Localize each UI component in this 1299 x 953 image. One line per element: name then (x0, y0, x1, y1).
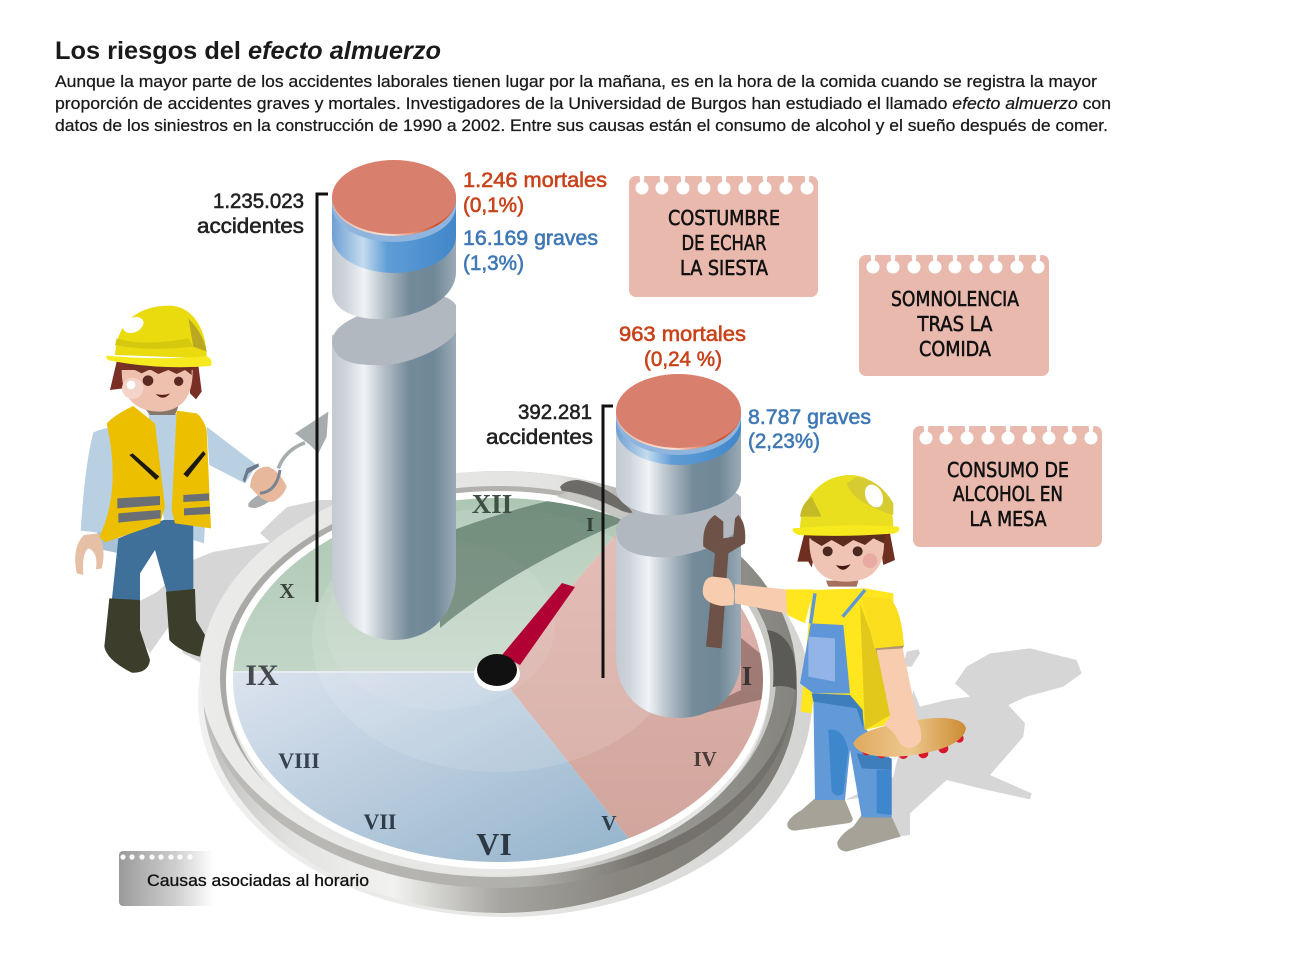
sector: blue (233, 673, 628, 862)
eyes and mouth (823, 546, 833, 556)
numeral III fragment: I (742, 661, 752, 691)
label: total right (486, 400, 593, 449)
clock hand (474, 583, 575, 691)
column cut face (332, 296, 456, 365)
eyes and mouth (143, 375, 153, 386)
column upper part (332, 197, 456, 319)
numeral I: I (586, 514, 594, 536)
trousers (813, 695, 892, 817)
worker right with wrench and bread (703, 475, 966, 852)
shirt (148, 414, 179, 520)
label: total right: accidentes (486, 425, 593, 449)
fatal disc (616, 376, 741, 450)
column shadow on green sector (440, 499, 626, 628)
shirt (801, 588, 893, 730)
hand on bread (884, 711, 921, 748)
boots (104, 598, 150, 673)
ring highlight top (557, 492, 632, 520)
note: alcohol (913, 425, 1102, 547)
bib overalls (800, 590, 865, 728)
label: fatal left: 1.246 mortales (463, 168, 607, 192)
hair (110, 362, 202, 399)
numeral VIII: VIII (278, 748, 320, 773)
intro text: proporción de accidentes graves y mortales. Investigadores de la Universidad de Burgos han estudiado el llamado efecto almuerzo con (55, 95, 1111, 113)
label: total left: accidentes (197, 214, 304, 238)
intro text (55, 73, 1111, 135)
clock base depth (203, 471, 797, 913)
face highlight (452, 508, 650, 772)
title: Los riesgos del efecto almuerzo (55, 37, 441, 65)
label: fatal left (463, 168, 607, 217)
numeral VII: VII (363, 809, 397, 834)
leader line left (317, 194, 328, 602)
left hand (75, 533, 104, 575)
hand on wrench (703, 577, 734, 606)
label: serious right: 8.787 graves (748, 405, 871, 429)
column: total lunch accidents (616, 374, 741, 718)
clock white rim (226, 491, 770, 869)
legend (119, 851, 369, 906)
wrench (703, 515, 745, 648)
note: somnolencia: TRAS LA (917, 312, 993, 336)
trowel (248, 412, 328, 508)
column lower part (332, 315, 456, 640)
numeral XII: XII (472, 489, 512, 519)
back sleeve (207, 427, 257, 483)
label: serious left: (1,3%) (463, 251, 524, 275)
column: total morning accidents (332, 160, 456, 640)
note: siesta (629, 175, 818, 297)
label: fatal right (619, 322, 746, 371)
face inner highlight (325, 540, 555, 710)
label: serious left: 16.169 graves (463, 226, 598, 250)
ring shadow top (560, 480, 634, 514)
label: total left (197, 189, 304, 238)
right hand (250, 467, 287, 502)
label: total left: 1.235.023 (213, 189, 304, 213)
leader line right (603, 406, 613, 678)
label: serious left (463, 226, 598, 275)
clock outer edge (198, 483, 812, 917)
sector: red (510, 535, 763, 838)
worker left with trowel (75, 306, 328, 673)
note: somnolencia: SOMNOLENCIA (891, 287, 1019, 311)
helmet (106, 306, 212, 367)
trousers (112, 517, 193, 602)
face (122, 370, 193, 412)
label: fatal right: (0,24 %) (644, 347, 722, 371)
clock groove (220, 486, 776, 870)
helmet (793, 475, 899, 536)
shoes (787, 798, 853, 831)
note: siesta: COSTUMBRE (668, 206, 780, 230)
note: somnolencia: COMIDA (919, 337, 991, 361)
white separators along sector edges (233, 671, 478, 673)
sleeve right (862, 597, 904, 651)
label: total right: 392.281 (518, 400, 592, 424)
sleeve left (786, 589, 813, 623)
note: alcohol: ALCOHOL EN (953, 482, 1063, 506)
shadow of right worker (845, 648, 1082, 837)
fatal disc (332, 162, 456, 236)
extended arm (735, 584, 795, 615)
legend: Causas asociadas al horario (147, 872, 369, 890)
bread (853, 718, 966, 759)
clock outer ring (200, 471, 796, 877)
label: fatal left: (0,1%) (463, 193, 524, 217)
serious band (332, 197, 456, 273)
numeral X: X (279, 579, 295, 603)
clock (198, 470, 812, 917)
note: siesta: DE ECHAR (682, 231, 767, 255)
clock lip (205, 496, 793, 888)
neck (143, 407, 178, 415)
neck (826, 581, 858, 587)
face (809, 538, 884, 582)
column cut face (616, 490, 741, 557)
numeral IX: IX (245, 659, 279, 692)
note: alcohol: LA MESA (970, 507, 1047, 531)
numeral V: V (601, 811, 617, 835)
note: alcohol: CONSUMO DE (947, 458, 1069, 482)
numeral VI: VI (476, 826, 512, 862)
vest (99, 406, 211, 542)
serious band (616, 411, 741, 465)
intro text: Aunque la mayor parte de los accidentes laborales tienen lugar por la mañana, es en la hora de la comida cuando se registra la mayor (55, 73, 1098, 91)
bare arm (877, 648, 918, 723)
clock inner light band (226, 493, 770, 875)
clock face sectors (233, 498, 763, 862)
label: serious right: (2,23%) (748, 429, 820, 453)
numeral IV: IV (693, 747, 717, 771)
label: serious right (748, 405, 871, 453)
left sleeve (81, 427, 119, 535)
sector: green (233, 498, 621, 671)
column lower part (616, 510, 741, 718)
intro text: datos de los siniestros en la construcción de 1990 a 2002. Entre sus causas están el consumo de alcohol y el sueño después de comer. (55, 117, 1108, 135)
note: siesta: LA SIESTA (680, 256, 768, 280)
column shadow on red sector (683, 638, 768, 718)
hair (797, 533, 895, 567)
note: somnolencia (859, 254, 1049, 376)
label: fatal right: 963 mortales (619, 322, 746, 346)
ring shadow right (767, 630, 797, 690)
column upper part (616, 411, 741, 515)
shadow of left worker (138, 500, 345, 668)
